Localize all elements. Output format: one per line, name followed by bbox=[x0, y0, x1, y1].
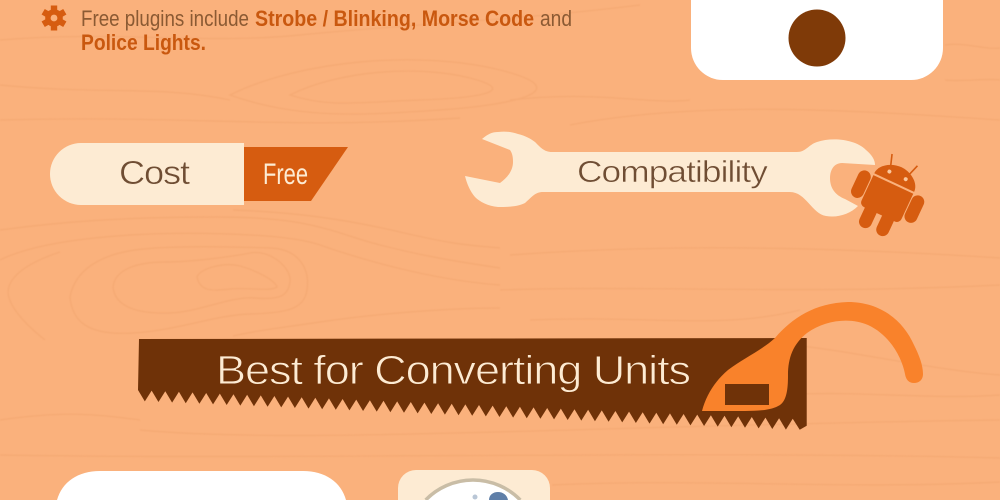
text block: free plugins: Police Lights. bbox=[81, 30, 206, 55]
text block: free plugins: Strobe / Blinking, Morse Code bbox=[255, 6, 534, 31]
badge icon bbox=[489, 492, 508, 500]
panel: cream card bottom bbox=[398, 470, 550, 500]
panel: white card bottom left bbox=[57, 471, 346, 500]
saw blade bbox=[138, 338, 807, 430]
icon: gear bbox=[42, 6, 66, 30]
cost label bbox=[50, 143, 348, 205]
cost value: Free bbox=[263, 158, 308, 191]
badge circle bbox=[426, 480, 520, 500]
text block: free plugins: and bbox=[540, 6, 572, 31]
icon: android bbox=[839, 145, 937, 247]
saw heading: Best for Converting Units bbox=[216, 347, 691, 393]
brown dot bbox=[788, 10, 846, 66]
wrench: compatibility bbox=[465, 132, 875, 217]
text block: free plugins: Free plugins include bbox=[81, 6, 249, 31]
saw handle bbox=[702, 302, 923, 411]
badge icon detail bbox=[472, 494, 478, 500]
compatibility heading: Compatibility bbox=[577, 154, 768, 189]
text block: free plugins bbox=[81, 6, 572, 55]
cost heading: Cost bbox=[119, 154, 190, 191]
cost tag bbox=[244, 147, 348, 201]
saw handle slot bbox=[725, 384, 769, 405]
saw bbox=[138, 302, 923, 430]
panel: white card top right bbox=[691, 0, 943, 80]
badge ring bbox=[426, 480, 520, 500]
